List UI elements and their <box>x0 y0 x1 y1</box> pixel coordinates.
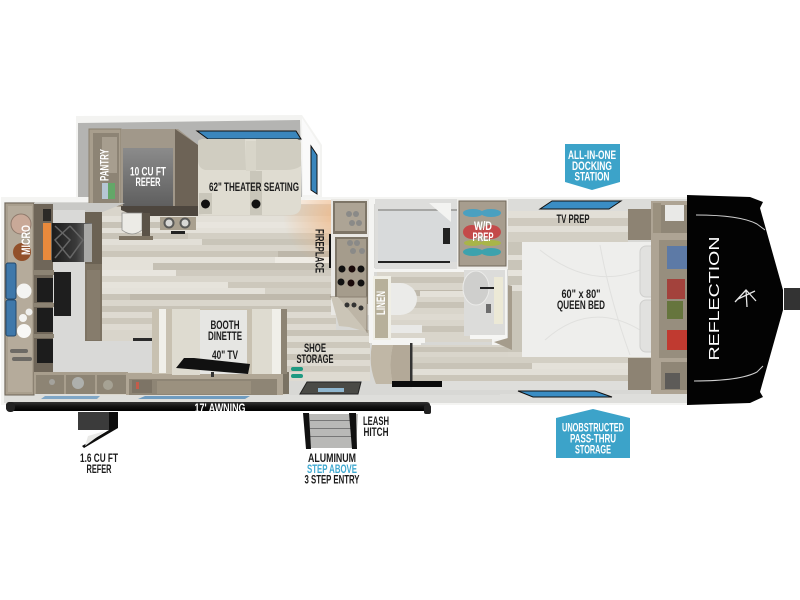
front cap with logo: REFLECTION <box>706 237 723 360</box>
leash hitch label: HITCH <box>364 427 388 439</box>
leash hitch label <box>363 416 389 439</box>
left base cabinets <box>34 204 53 380</box>
shoe storage label <box>296 343 334 366</box>
outdoor refrigerator <box>78 412 118 448</box>
front cap with logo <box>687 195 800 405</box>
bedroom cabinets <box>628 201 687 394</box>
fireplace glow <box>283 200 336 275</box>
side table <box>160 217 196 234</box>
leash hitch label: LEASH <box>363 416 389 428</box>
booth dinette: 40" TV <box>212 350 238 362</box>
booth dinette: DINETTE <box>208 331 242 343</box>
pillows <box>640 246 660 352</box>
step label: 3 STEP ENTRY <box>304 474 360 486</box>
callout: pass-thru storage: STORAGE <box>575 444 611 456</box>
shoe storage label: STORAGE <box>296 354 334 366</box>
pantry: PANTRY <box>100 149 112 181</box>
bed: 60" x 80" <box>562 289 600 301</box>
callout: docking station: STATION <box>574 172 610 184</box>
step label <box>304 453 360 486</box>
fireplace wall and wine cabinets <box>329 199 370 332</box>
king pin <box>784 288 800 310</box>
slide-out window side <box>311 146 317 194</box>
bathroom toilet <box>383 283 422 333</box>
kitchen counter L-shape <box>34 203 153 380</box>
bathroom door curve <box>371 343 442 387</box>
right base cabinets <box>85 212 102 264</box>
tv prep label: TV PREP <box>556 214 590 226</box>
washer dryer prep: PREP <box>472 232 494 244</box>
callout: pass-thru storage: UNOBSTRUCTED <box>562 422 624 434</box>
tv <box>176 358 250 374</box>
bathroom vanity <box>463 270 512 350</box>
wood floor <box>100 205 652 395</box>
bedroom window bottom <box>518 391 612 397</box>
awning <box>6 402 431 415</box>
refrigerator <box>121 129 198 216</box>
callout: docking station <box>565 144 620 190</box>
linen cabinet: LINEN <box>376 291 388 315</box>
kitchen tall cabinet and shelves <box>5 203 34 395</box>
refrigerator label <box>80 453 118 476</box>
bedroom window top <box>540 201 621 209</box>
booth dinette <box>152 309 287 377</box>
door mat <box>300 382 361 394</box>
stove <box>52 223 92 262</box>
step label: STEP ABOVE <box>307 464 357 476</box>
microwave dishes <box>11 214 33 261</box>
washer dryer prep <box>457 199 508 269</box>
callout: docking station: ALL-IN-ONE <box>568 150 616 162</box>
plates <box>16 284 32 338</box>
refrigerator label: REFER <box>86 464 112 476</box>
theater seating <box>198 139 301 215</box>
slide-out window top <box>197 131 301 139</box>
booth dinette: BOOTH <box>210 320 240 332</box>
refrigerator: REFER <box>136 177 161 189</box>
entry steps <box>303 413 358 449</box>
oven <box>43 223 51 260</box>
bed: QUEEN BED <box>557 300 605 312</box>
trailer body shell <box>1 197 691 405</box>
washer dryer prep: W/D <box>474 221 492 233</box>
fireplace label: FIREPLACE <box>312 229 324 273</box>
theater seating: 62" THEATER SEATING <box>209 182 299 194</box>
blue storage bins <box>6 263 16 336</box>
microwave dishes: MICRO <box>21 225 33 255</box>
pantry <box>89 129 121 206</box>
refrigerator: 10 CU FT <box>130 166 166 178</box>
shoe storage label: SHOE <box>304 343 326 355</box>
bathroom walls <box>369 197 507 345</box>
slide-out room <box>76 115 322 200</box>
callout: pass-thru storage <box>556 409 630 458</box>
lower storage cabinets <box>34 372 289 399</box>
sink <box>54 272 71 316</box>
stool <box>119 213 153 240</box>
shower <box>375 199 461 269</box>
shoes <box>291 367 303 378</box>
bed <box>522 242 660 357</box>
awning: 17' AWNING <box>194 403 246 415</box>
step label: ALUMINUM <box>308 453 356 465</box>
callout: docking station: DOCKING <box>572 161 612 173</box>
callout: pass-thru storage: PASS-THRU <box>570 434 616 446</box>
refrigerator label: 1.6 CU FT <box>80 453 118 465</box>
linen cabinet <box>373 276 391 340</box>
